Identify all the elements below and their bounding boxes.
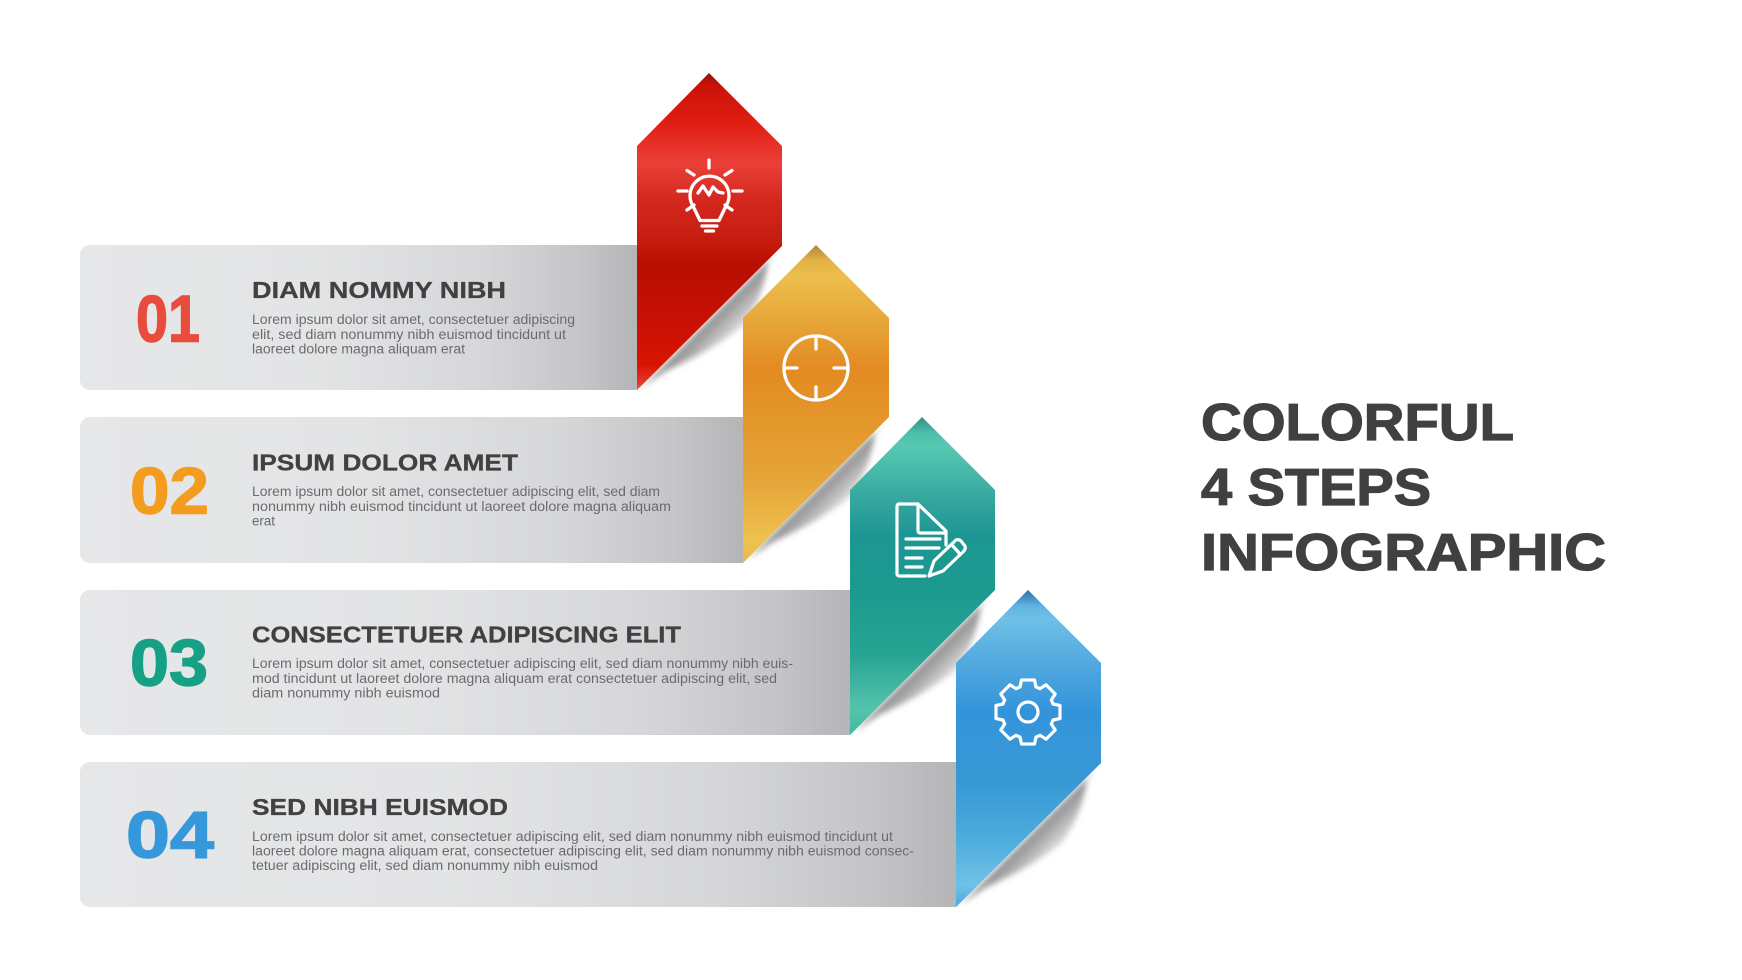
- step 3: [80, 417, 995, 735]
- panel: step 3 bar: [80, 590, 850, 735]
- step 1: [80, 73, 782, 390]
- title: [1201, 394, 1606, 582]
- text block: step 1: [252, 312, 575, 356]
- number 01: 01: [136, 282, 200, 356]
- title: 4 STEPS: [1201, 459, 1431, 517]
- text block: step 1: elit, sed diam nonummy nibh euismod tincidunt ut: [252, 327, 566, 342]
- ribbon: blue: [956, 590, 1101, 907]
- text block: step 2: [252, 484, 671, 528]
- heading: step 1: DIAM NOMMY NIBH: [252, 277, 506, 303]
- ribbon shadow: step 4: [960, 770, 1095, 905]
- text block: step 4: [252, 829, 914, 873]
- number 03: 03: [130, 626, 208, 700]
- text block: step 3: diam nonummy nibh euismod: [252, 686, 440, 700]
- ribbon: teal: [850, 417, 995, 735]
- ribbon shadow: step 3: [854, 597, 989, 732]
- title: COLORFUL: [1201, 394, 1514, 452]
- title: INFOGRAPHIC: [1201, 524, 1606, 582]
- ribbon: red: [637, 73, 782, 390]
- text block: step 4: Lorem ipsum dolor sit amet, consectetuer adipiscing elit, sed diam nonummy nibh euismod tincidunt ut: [252, 829, 893, 844]
- panel: step 2 bar: [80, 417, 743, 563]
- icon: gear: [996, 680, 1060, 744]
- step 4: [80, 590, 1101, 907]
- text block: step 2: erat: [252, 514, 275, 528]
- ribbon shadow: step 1: [641, 253, 776, 388]
- text block: step 4: laoreet dolore magna aliquam erat, consectetuer adipiscing elit, sed diam nonummy nibh euismod consec-: [252, 844, 914, 858]
- number 04: 04: [126, 798, 214, 872]
- ribbon shadow: step 2: [748, 424, 883, 559]
- text block: step 3: Lorem ipsum dolor sit amet, consectetuer adipiscing elit, sed diam nonummy nibh euis-: [252, 656, 793, 671]
- text block: step 2: nonummy nibh euismod tincidunt ut laoreet dolore magna aliquam: [252, 499, 671, 514]
- ribbon: gold: [743, 245, 889, 563]
- panel: step 1 bar: [80, 245, 637, 390]
- text block: step 3: [252, 656, 793, 700]
- panel: step 4 bar: [80, 762, 956, 907]
- heading: step 3: CONSECTETUER ADIPISCING ELIT: [252, 622, 681, 648]
- icon: light bulb: [678, 160, 742, 231]
- icon: target: [784, 336, 848, 400]
- heading: step 2: IPSUM DOLOR AMET: [252, 450, 518, 476]
- text block: step 2: Lorem ipsum dolor sit amet, consectetuer adipiscing elit, sed diam: [252, 484, 660, 499]
- step 2: [80, 245, 889, 563]
- text block: step 1: Lorem ipsum dolor sit amet, consectetuer adipiscing: [252, 312, 575, 327]
- icon: document and pencil: [897, 504, 965, 576]
- heading: step 4: SED NIBH EUISMOD: [252, 794, 508, 820]
- number 02: 02: [130, 454, 209, 528]
- text block: step 3: mod tincidunt ut laoreet dolore magna aliquam erat consectetuer adipiscing elit, sed: [252, 671, 777, 686]
- text block: step 1: laoreet dolore magna aliquam erat: [252, 342, 465, 356]
- text block: step 4: tetuer adipiscing elit, sed diam nonummy nibh euismod: [252, 858, 598, 873]
